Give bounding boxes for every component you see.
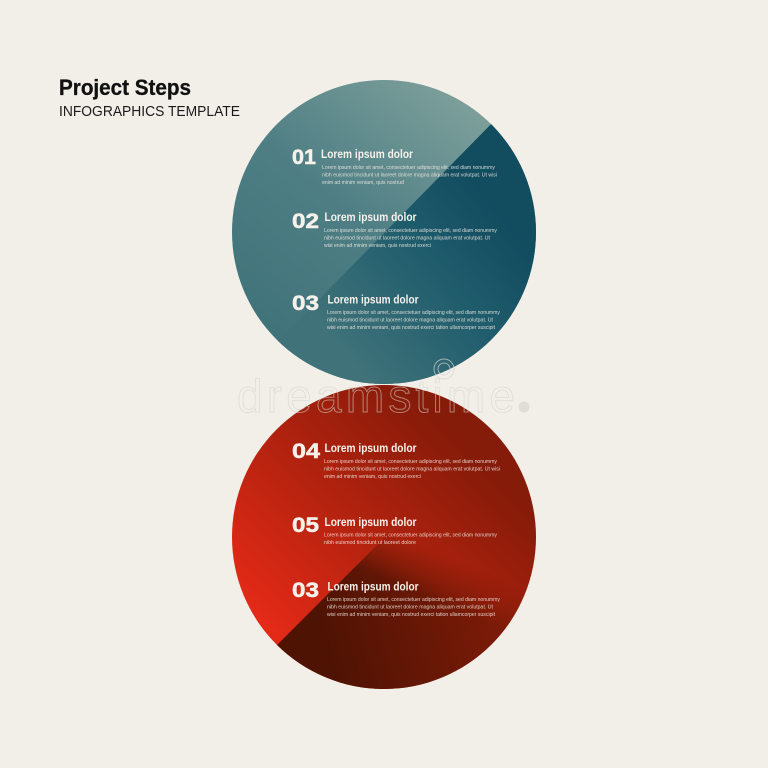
body: nibh euismod tincidunt ut laoreet dolore magna aliquam erat volutpat. Ut bbox=[327, 318, 494, 324]
heading: Lorem ipsum dolor bbox=[328, 294, 419, 306]
step 06 labelled 03 bbox=[292, 578, 500, 618]
step 04 bbox=[292, 439, 500, 480]
number: 05 bbox=[292, 513, 319, 537]
panel: red circle bbox=[232, 385, 540, 695]
heading: Lorem ipsum dolor bbox=[324, 212, 417, 224]
heading: Lorem ipsum dolor bbox=[324, 443, 417, 455]
body: nibh euismod tincidunt ut laoreet dolore bbox=[324, 540, 416, 546]
body bbox=[322, 165, 497, 186]
step 01 bbox=[292, 145, 497, 186]
step 03 bbox=[292, 291, 500, 331]
body: wisi enim ad minim veniam, quis nostrud exerci tation ullamcorper suscipit bbox=[327, 325, 496, 331]
subtitle: INFOGRAPHICS TEMPLATE bbox=[59, 103, 240, 120]
body: Lorem ipsum dolor sit amet, consectetuer adipiscing elit, sed diam nonummy bbox=[327, 597, 500, 603]
body: Lorem ipsum dolor sit amet, consectetuer adipiscing elit, sed diam nonummy bbox=[324, 459, 497, 465]
body: wisi enim ad minim veniam, quis nostrud exerci bbox=[324, 243, 431, 249]
number: 02 bbox=[292, 209, 319, 233]
step 02 bbox=[292, 209, 497, 249]
number: 01 bbox=[292, 145, 316, 169]
body: nibh euismod tincidunt ut laoreet dolore magna aliquam erat volutpat. Ut bbox=[324, 236, 491, 242]
heading: Lorem ipsum dolor bbox=[321, 149, 413, 161]
light segment bbox=[232, 80, 536, 384]
title: Project Steps bbox=[59, 75, 191, 100]
body bbox=[327, 597, 500, 618]
step 05 bbox=[292, 513, 497, 546]
dark segment bbox=[278, 124, 536, 384]
number: 04 bbox=[292, 439, 320, 463]
body: Lorem ipsum dolor sit amet, consectetuer adipiscing elit, sed diam nonummy bbox=[324, 228, 497, 234]
watermark dot bbox=[518, 402, 530, 412]
body: Lorem ipsum dolor sit amet, consectetuer adipiscing elit, sed diam nonummy bbox=[327, 310, 500, 316]
number: 03 bbox=[292, 578, 319, 602]
body: wisi enim ad minim veniam, quis nostrud exerci tation ullamcorper suscipit bbox=[327, 612, 496, 618]
dark segment bbox=[277, 536, 524, 689]
body: Lorem ipsum dolor sit amet, consectetuer adipiscing elit, sed diam nonummy bbox=[324, 532, 497, 538]
title block bbox=[59, 75, 240, 120]
body: nibh euismod tincidunt ut laoreet dolore magna aliquam erat volutpat. Ut bbox=[327, 604, 494, 610]
body bbox=[327, 310, 500, 331]
body bbox=[324, 459, 500, 480]
heading: Lorem ipsum dolor bbox=[328, 582, 419, 594]
body bbox=[324, 228, 497, 249]
heading: Lorem ipsum dolor bbox=[324, 517, 417, 529]
body: nibh euismod tincidunt ut laoreet dolore magna aliquam erat volutpat. Ut wisi bbox=[322, 172, 497, 178]
panel: teal circle bbox=[230, 80, 540, 390]
body: nibh euismod tincidunt ut laoreet dolore magna aliquam erat volutpat. Ut wisi bbox=[324, 466, 500, 472]
watermark emblem bbox=[434, 359, 454, 379]
number: 03 bbox=[292, 291, 319, 315]
body: Lorem ipsum dolor sit amet, consectetuer adipiscing elit, sed diam nonummy bbox=[322, 165, 495, 171]
body bbox=[324, 532, 497, 546]
body: enim ad minim veniam, quis nostrud bbox=[322, 180, 404, 186]
watermark: dreamstime bbox=[237, 370, 515, 422]
body: enim ad minim veniam, quis nostrud exerci bbox=[324, 474, 421, 480]
bright segment bbox=[232, 385, 536, 689]
